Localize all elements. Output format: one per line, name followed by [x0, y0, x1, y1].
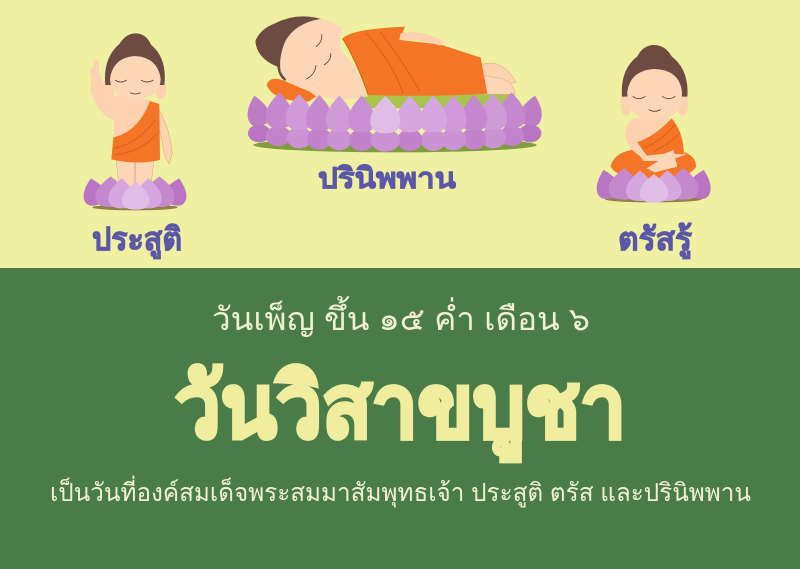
pillow — [267, 79, 318, 102]
face — [627, 69, 682, 120]
illustration: seated meditating Buddha on lotus — [592, 45, 715, 203]
ears — [103, 77, 114, 99]
head and face — [280, 19, 343, 88]
lower petal row — [248, 124, 541, 152]
feet — [482, 63, 516, 85]
subtitle: full moon date: วันเพ็ญ ขึ้น ๑๕ ค่ำ เดือน ๖ — [212, 296, 590, 337]
neck and arm under head — [303, 45, 368, 100]
hands — [640, 150, 677, 172]
robe — [111, 101, 160, 163]
robe lap — [611, 150, 696, 182]
main title: วันวิสาขบูชา — [175, 357, 626, 462]
lotus: seated figure — [592, 167, 715, 203]
illustration: baby Buddha standing on lotus — [79, 33, 191, 210]
legs — [116, 158, 154, 190]
face details — [115, 80, 153, 94]
hair — [255, 16, 323, 81]
label: ตรัสรู้: ตรัสรู้ — [618, 221, 692, 260]
label: ปรินิพพาน: ปรินิพพาน — [318, 163, 456, 195]
ground shadow — [253, 138, 537, 152]
hair — [622, 45, 688, 97]
robe — [343, 27, 487, 96]
top yellow panel — [0, 0, 800, 268]
face details — [633, 96, 675, 111]
lotus: reclining figure — [244, 92, 546, 152]
raised arm and torso — [89, 59, 159, 153]
face — [110, 56, 161, 99]
description line: เป็นวันที่องค์สมเด็จพระสมมาสัมพุทธเจ้า ประสูติ ตรัส และปรินิพพาน — [50, 475, 751, 508]
ears — [620, 91, 632, 116]
illustration: reclining Buddha on lotus — [244, 16, 546, 152]
label: ประสูติ: ประสูติ — [92, 221, 182, 260]
bottom green panel — [0, 268, 800, 569]
green mat — [360, 89, 518, 108]
face details — [306, 34, 331, 79]
right arm — [157, 107, 172, 164]
arm resting on robe — [399, 32, 445, 46]
hair — [105, 33, 165, 85]
lotus: standing figure — [79, 176, 191, 210]
torso and arm — [625, 118, 685, 160]
robe upper — [637, 118, 684, 156]
